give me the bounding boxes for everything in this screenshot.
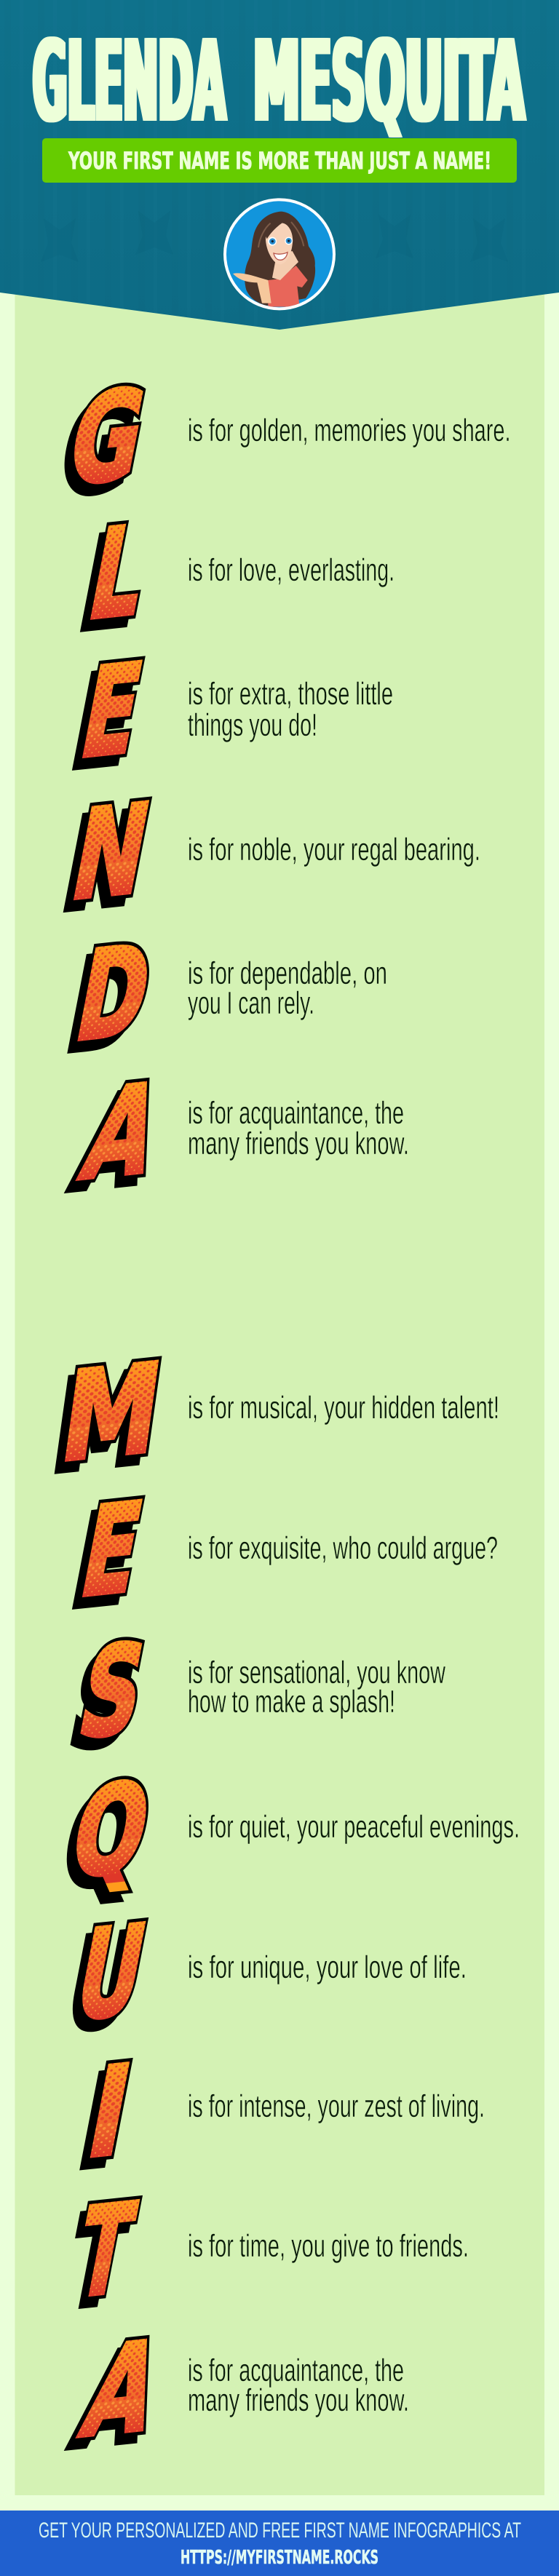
text: dependable <box>188 955 387 1021</box>
row L <box>71 499 395 658</box>
letter N: N <box>62 777 160 928</box>
letter Q: Q <box>61 1755 160 1907</box>
footer <box>0 2511 559 2576</box>
letter M: M <box>54 1337 169 1490</box>
text: acquaintance: many friends you know. <box>188 1126 409 1161</box>
letter E: E <box>71 1476 152 1625</box>
text: acquaintance: is for acquaintance, the <box>188 2353 404 2388</box>
text: love: is for love, everlasting. <box>188 552 395 588</box>
letter G: G <box>59 362 156 513</box>
row M <box>46 1337 499 1499</box>
row G <box>51 362 511 522</box>
letter M: M <box>54 1337 169 1490</box>
letter E: E <box>71 637 152 786</box>
letter M: M <box>46 1346 161 1499</box>
letter T: T <box>58 2187 135 2335</box>
text: dependable: is for dependable, on <box>188 955 387 991</box>
letter D: D <box>58 929 154 1079</box>
letter U: U <box>58 1907 148 2058</box>
title: GLENDA <box>33 15 226 148</box>
text: extra <box>188 676 393 743</box>
row N <box>54 777 480 937</box>
letter A: A <box>61 2324 167 2476</box>
row S <box>61 1618 445 1776</box>
letter L: L <box>79 499 157 648</box>
text: acquaintance <box>188 1095 409 1161</box>
letter U: U <box>66 1898 156 2048</box>
row E2 <box>63 1476 498 1634</box>
title: MESQUITA <box>253 15 525 148</box>
row E <box>63 637 393 795</box>
letter L: L <box>79 499 157 648</box>
letter Q: Q <box>61 1755 160 1907</box>
row Q <box>53 1755 520 1916</box>
letter Q: Q <box>53 1765 152 1916</box>
row A2 <box>61 2315 409 2476</box>
letter T: T <box>66 2177 143 2326</box>
row T <box>58 2177 469 2335</box>
row U <box>58 1898 467 2058</box>
letter S: S <box>69 1618 155 1767</box>
letter T: T <box>66 2177 143 2326</box>
letter I: I <box>78 2039 141 2186</box>
text: acquaintance: many friends you know. <box>188 2382 409 2418</box>
text: sensational: how to make a splash! <box>188 1684 395 1720</box>
letter N: N <box>54 787 152 937</box>
row A <box>61 1057 409 1218</box>
letter E: E <box>63 1485 144 1634</box>
text: dependable: you I can rely. <box>188 985 314 1021</box>
letter G: G <box>59 362 156 513</box>
row I <box>70 2039 485 2195</box>
letter U: U <box>66 1898 156 2048</box>
letter A: A <box>69 1057 175 1209</box>
letter S: S <box>61 1627 147 1776</box>
letter E: E <box>71 637 152 786</box>
letter A: A <box>61 1067 167 1218</box>
letter G: G <box>51 372 148 522</box>
subtitle bar <box>42 138 517 183</box>
row D <box>58 919 387 1079</box>
letter D: D <box>66 919 162 1070</box>
letter E: E <box>71 1476 152 1625</box>
title <box>32 15 527 148</box>
letter E: E <box>63 646 144 795</box>
footer: HTTPS://MYFIRSTNAME.ROCKS <box>181 2547 378 2569</box>
text: acquaintance <box>188 2353 409 2418</box>
text: acquaintance: is for acquaintance, the <box>188 1095 404 1131</box>
text: extra: is for extra, those little <box>188 676 393 712</box>
letter A: A <box>69 1057 175 1209</box>
avatar: woman in round frame <box>223 198 336 310</box>
letter A: A <box>69 2315 175 2466</box>
letter D: D <box>66 919 162 1070</box>
letter L: L <box>71 509 149 658</box>
letter S: S <box>69 1618 155 1767</box>
letter I: I <box>78 2039 141 2186</box>
letter N: N <box>62 777 160 928</box>
text: extra: things you do! <box>188 707 317 743</box>
letter I: I <box>70 2048 133 2195</box>
letter A: A <box>69 2315 175 2466</box>
text: sensational <box>188 1655 445 1720</box>
header banner <box>0 0 559 330</box>
